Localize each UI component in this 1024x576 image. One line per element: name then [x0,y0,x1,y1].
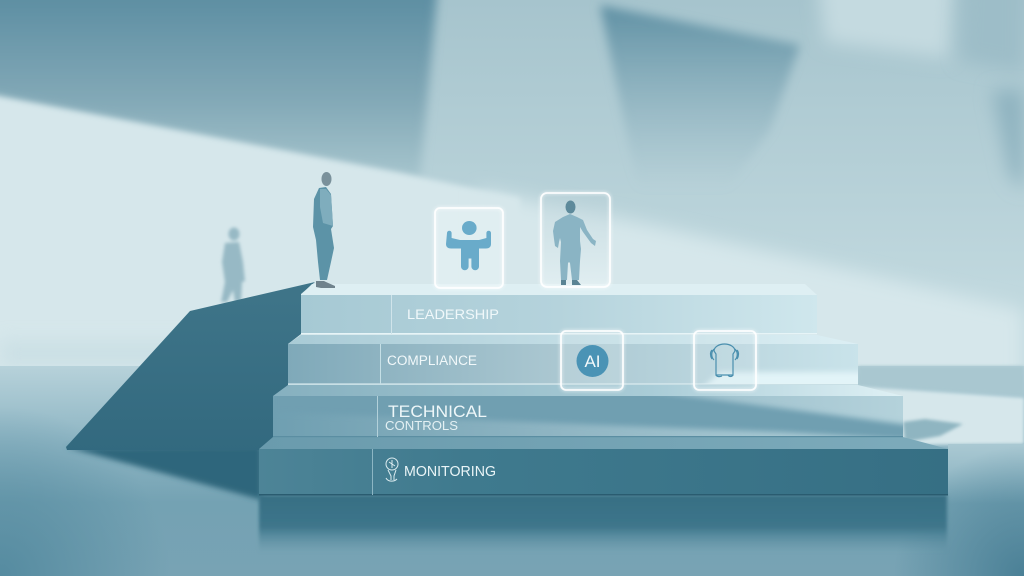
icon: bulb monitor [386,458,398,481]
floor [0,366,1024,576]
card: person silhouette [541,193,610,287]
floor shadows [66,445,947,553]
label: compliance: COMPLIANCE [387,353,477,368]
step 1: leadership [301,284,817,334]
wall shadow figure [221,228,245,302]
step 3: technical controls [273,385,910,440]
icon: outline device [710,344,738,377]
label: controls: CONTROLS [385,418,458,433]
icon: person arms raised [446,221,491,270]
icon: AI circle [576,345,608,377]
standing person [313,172,335,288]
card: robot outline [694,331,756,390]
step 2: compliance [288,335,858,384]
icon: standing figure [553,200,596,285]
label: technical: TECHNICAL [388,403,487,421]
card: AI badge: AI [584,352,601,371]
card: AI badge [561,331,623,390]
dark ramp [66,282,315,495]
card: person icon [435,208,503,288]
label: leadership: LEADERSHIP [407,307,499,322]
staircase [259,284,948,496]
step 4: monitoring [259,437,948,496]
background wall [0,0,1024,400]
label: monitoring: MONITORING [404,464,496,480]
